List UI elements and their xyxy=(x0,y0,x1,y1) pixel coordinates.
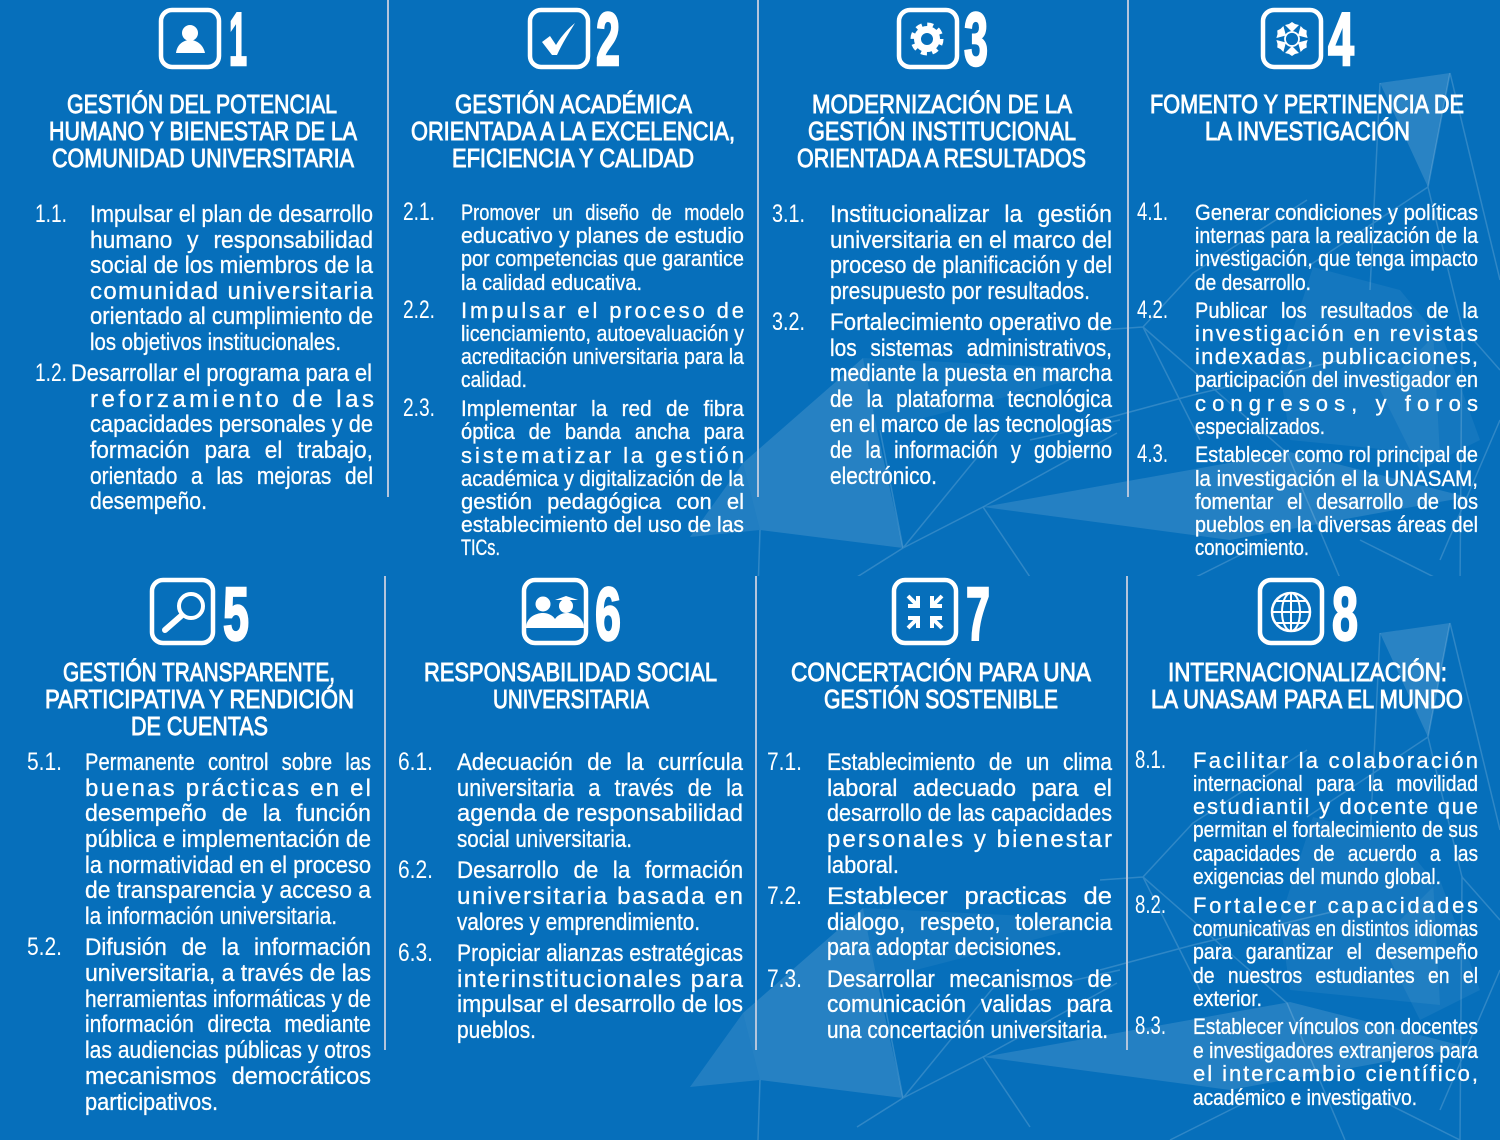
text block 8.1: Facilitar la colaboración xyxy=(1193,748,1478,773)
text block 7.1: personales y bienestar xyxy=(827,826,1112,853)
text block 4.2: participación del investigador en xyxy=(1195,367,1478,392)
heading 5: PARTICIPATIVA Y RENDICIÓN xyxy=(45,684,354,714)
heading 2 xyxy=(411,89,735,173)
icon: people xyxy=(524,580,586,643)
text block 2.1: 2.1. xyxy=(403,198,435,226)
heading 5 xyxy=(45,657,354,741)
text block 8.1: 8.1. xyxy=(1135,746,1166,774)
heading 1 xyxy=(49,89,358,173)
text block 5.1: la normatividad en el proceso xyxy=(85,852,371,879)
text block 2.1: la calidad educativa. xyxy=(461,270,642,295)
text block 3.1: presupuesto por resultados. xyxy=(830,278,1090,305)
text block 4.3: fomentar el desarrollo de los xyxy=(1195,489,1478,514)
heading 1: COMUNIDAD UNIVERSITARIA xyxy=(52,143,355,173)
text block 2.2: licenciamiento, autoevaluación y xyxy=(461,321,744,346)
text block 6.3: impulsar el desarrollo de los xyxy=(457,991,743,1018)
number 7: 7 xyxy=(966,572,990,656)
text block 7.3 xyxy=(767,965,1113,1044)
text block 4.3 xyxy=(1137,440,1478,560)
text block 3.2: 3.2. xyxy=(772,308,805,336)
heading 2: GESTIÓN ACADÉMICA xyxy=(455,89,693,119)
text block 6.1: Adecuación de la currícula xyxy=(457,749,744,776)
text block 6.2: Desarrollo de la formación xyxy=(457,857,743,884)
heading 2: EFICIENCIA Y CALIDAD xyxy=(452,143,694,173)
heading 7: CONCERTACIÓN PARA UNA xyxy=(791,657,1092,687)
text block 4.1: 4.1. xyxy=(1137,198,1168,226)
text block 1.1: Impulsar el plan de desarrollo xyxy=(90,201,373,228)
text block 7.1: desarrollo de las capacidades xyxy=(827,800,1112,827)
text block 5.2: participativos. xyxy=(85,1089,218,1116)
text block 4.3: Establecer como rol principal de xyxy=(1195,442,1478,467)
panel 7: concertación xyxy=(767,572,1113,1044)
text block 6.3: interinstitucionales para xyxy=(457,966,744,993)
text block 4.2: 4.2. xyxy=(1137,296,1168,324)
heading 3: MODERNIZACIÓN DE LA xyxy=(812,89,1073,119)
icon: magnifying glass xyxy=(152,580,213,643)
text block 4.3: conocimiento. xyxy=(1195,535,1309,560)
text block 8.3: 8.3. xyxy=(1135,1012,1166,1040)
text block 5.1: buenas prácticas en el xyxy=(85,775,371,802)
number 8: 8 xyxy=(1332,572,1358,656)
text block 5.2: información directa mediante xyxy=(85,1011,371,1038)
text block 5.2: herramientas informáticas y de xyxy=(85,986,371,1013)
text block 4.3: la investigación el la UNASAM, xyxy=(1195,466,1478,491)
panel 3: modernización xyxy=(772,0,1113,490)
text block 8.2: 8.2. xyxy=(1135,891,1166,919)
text block 8.1 xyxy=(1135,746,1478,889)
text block 8.2 xyxy=(1135,891,1478,1011)
background: low-poly network xyxy=(690,73,1500,1140)
text block 5.1: la información universitaria. xyxy=(85,903,337,930)
text block 7.2: dialogo, respeto, tolerancia xyxy=(827,909,1113,936)
text block 4.2: investigación en revistas xyxy=(1195,321,1478,346)
text block 5.1: de transparencia y acceso a xyxy=(85,877,372,904)
text block 7.3: Desarrollar mecanismos de xyxy=(827,966,1112,993)
text block 2.3: óptica de banda ancha para xyxy=(461,419,745,444)
text block 8.1: estudiantil y docente que xyxy=(1193,794,1478,819)
text block 3.1: 3.1. xyxy=(772,200,805,228)
text block 1.2: Desarrollar el programa para el xyxy=(71,360,372,387)
icon: arrows inward xyxy=(894,580,956,643)
text block 4.1 xyxy=(1137,198,1479,295)
text block 2.2: acreditación universitaria para la xyxy=(461,344,745,369)
text block 5.2: las audiencias públicas y otros xyxy=(85,1037,371,1064)
heading 1: GESTIÓN DEL POTENCIAL xyxy=(67,89,337,119)
panel 5: gestión transparente xyxy=(27,572,372,1116)
text block 7.1: 7.1. xyxy=(767,748,802,776)
text block 5.1: Permanente control sobre las xyxy=(85,749,371,776)
text block 4.2: Publicar los resultados de la xyxy=(1195,298,1479,323)
text block 1.2: desempeño. xyxy=(90,488,207,515)
heading 3: ORIENTADA A RESULTADOS xyxy=(797,143,1086,173)
text block 6.1: universitaria a través de la xyxy=(457,775,744,802)
text block 3.2: electrónico. xyxy=(830,463,937,490)
icon: check box xyxy=(530,10,588,67)
heading 8 xyxy=(1151,657,1463,714)
text block 2.1: por competencias que garantice xyxy=(461,246,744,271)
heading 2: ORIENTADA A LA EXCELENCIA, xyxy=(411,116,735,146)
text block 1.1: los objetivos institucionales. xyxy=(90,329,341,356)
text block 3.2: de la información y gobierno xyxy=(830,437,1112,464)
text block 1.2: 1.2. xyxy=(35,359,67,387)
text block 4.1: de desarrollo. xyxy=(1195,270,1311,295)
text block 7.1: laboral. xyxy=(827,852,899,879)
number 6: 6 xyxy=(595,572,621,656)
text block 1.1: orientado al cumplimiento de xyxy=(90,303,373,330)
text block 1.2: reforzamiento de las xyxy=(90,386,374,413)
text block 6.2: 6.2. xyxy=(398,856,433,884)
text block 2.3: gestión pedagógica con el xyxy=(461,489,744,514)
text block 5.2: 5.2. xyxy=(27,933,62,961)
text block 1.1: comunidad universitaria xyxy=(90,278,374,305)
text block 4.3: 4.3. xyxy=(1137,440,1168,468)
text block 8.3: el intercambio científico, xyxy=(1193,1061,1478,1086)
heading 6: RESPONSABILIDAD SOCIAL xyxy=(424,657,717,687)
text block 3.1 xyxy=(772,200,1112,305)
text block 2.1: educativo y planes de estudio xyxy=(461,223,744,248)
text block 2.3: Implementar la red de fibra xyxy=(461,396,745,421)
text block 7.1: Establecimiento de un clima xyxy=(827,749,1113,776)
heading 6 xyxy=(424,657,717,714)
text block 6.1: social universitaria. xyxy=(457,826,632,853)
icon: snowflake network xyxy=(1263,10,1321,67)
text block 3.2 xyxy=(772,308,1113,490)
text block 6.1 xyxy=(398,748,744,853)
heading 6: UNIVERSITARIA xyxy=(493,684,650,714)
text block 7.2: Establecer practicas de xyxy=(827,883,1112,910)
heading 3 xyxy=(797,89,1086,173)
text block 8.1: exigencias del mundo global. xyxy=(1193,864,1441,889)
heading 4: LA INVESTIGACIÓN xyxy=(1205,116,1410,146)
heading 8: INTERNACIONALIZACIÓN: xyxy=(1168,657,1447,687)
text block 6.2 xyxy=(398,856,743,936)
icon: globe xyxy=(1260,580,1322,643)
panel 4: fomento de la investigación xyxy=(1137,0,1479,560)
text block 7.1: laboral adecuado para el xyxy=(827,775,1112,802)
text block 2.2: Impulsar el proceso de xyxy=(461,298,744,323)
text block 7.1 xyxy=(767,748,1113,879)
text block 5.2: universitaria, a través de las xyxy=(85,960,371,987)
text block 4.2: congresos, y foros xyxy=(1195,391,1478,416)
text block 7.3: comunicación validas para xyxy=(827,991,1113,1018)
text block 6.2: valores y emprendimiento. xyxy=(457,909,700,936)
text block 6.3: pueblos. xyxy=(457,1017,536,1044)
text block 6.3: Propiciar alianzas estratégicas xyxy=(457,940,743,967)
text block 1.2 xyxy=(35,359,374,515)
text block 3.1: Institucionalizar la gestión xyxy=(830,201,1112,228)
heading 3: GESTIÓN INSTITUCIONAL xyxy=(808,116,1076,146)
heading 5: GESTIÓN TRANSPARENTE, xyxy=(63,657,335,687)
heading 7: GESTIÓN SOSTENIBLE xyxy=(824,684,1058,714)
text block 5.2: mecanismos democráticos xyxy=(85,1063,371,1090)
text block 2.3: TICs. xyxy=(461,535,500,560)
text block 3.2: en el marco de las tecnologías xyxy=(830,411,1112,438)
text block 6.3 xyxy=(398,939,744,1044)
text block 8.2: Fortalecer capacidades xyxy=(1193,893,1478,918)
text block 4.1: Generar condiciones y políticas xyxy=(1195,200,1478,225)
text block 3.2: los sistemas administrativos, xyxy=(830,335,1112,362)
text block 3.1: universitaria en el marco del xyxy=(830,227,1112,254)
text block 8.2: exterior. xyxy=(1193,986,1262,1011)
text block 6.1: agenda de responsabilidad xyxy=(457,800,743,827)
text block 3.2: de la plataforma tecnológica xyxy=(830,386,1113,413)
text block 8.3 xyxy=(1135,1012,1479,1110)
text block 4.2: especializados. xyxy=(1195,414,1325,439)
text block 2.3: establecimiento del uso de las xyxy=(461,512,744,537)
text block 5.1: pública e implementación de xyxy=(85,826,371,853)
text block 5.1 xyxy=(27,748,372,930)
text block 7.3: 7.3. xyxy=(767,965,802,993)
panel 1: gestión del potencial humano xyxy=(35,0,374,515)
text block 5.1: 5.1. xyxy=(27,748,62,776)
number 5: 5 xyxy=(223,572,249,656)
text block 5.1: desempeño de la función xyxy=(85,800,371,827)
panel 6: responsabilidad social xyxy=(398,572,744,1044)
text block 3.1: proceso de planificación y del xyxy=(830,252,1112,279)
text block 5.2: Difusión de la información xyxy=(85,934,371,961)
text block 1.1 xyxy=(35,200,374,356)
text block 2.3 xyxy=(403,394,745,560)
text block 7.2: para adoptar decisiones. xyxy=(827,934,1062,961)
text block 6.1: 6.1. xyxy=(398,748,433,776)
text block 4.2 xyxy=(1137,296,1479,439)
text block 1.1: humano y responsabilidad xyxy=(90,227,373,254)
text block 2.2: calidad. xyxy=(461,367,527,392)
text block 2.3: 2.3. xyxy=(403,394,435,422)
text block 7.2 xyxy=(767,882,1113,961)
text block 2.3: sistematizar la gestión xyxy=(461,443,744,468)
text block 1.1: social de los miembros de la xyxy=(90,252,374,279)
text block 1.2: formación para el trabajo, xyxy=(90,437,373,464)
text block 2.3: académica y digitalización de la xyxy=(461,466,745,491)
text block 6.2: universitaria basada en xyxy=(457,883,743,910)
text block 1.2: orientado a las mejoras del xyxy=(90,463,373,490)
text block 5.2 xyxy=(27,933,371,1116)
text block 3.2: Fortalecimiento operativo de xyxy=(830,309,1112,336)
icon: person xyxy=(161,10,219,67)
text block 2.2: 2.2. xyxy=(403,296,435,324)
dividers xyxy=(385,0,1128,1050)
text block 2.1 xyxy=(403,198,744,295)
text block 2.2 xyxy=(403,296,745,392)
heading 5: DE CUENTAS xyxy=(131,711,268,741)
panel 2: gestión académica xyxy=(403,0,745,560)
text block 2.1: Promover un diseño de modelo xyxy=(461,200,744,225)
heading 1: HUMANO Y BIENESTAR DE LA xyxy=(49,116,358,146)
text block 4.2: indexadas, publicaciones, xyxy=(1195,344,1478,369)
heading 4 xyxy=(1150,89,1464,146)
icon: gear xyxy=(899,10,957,67)
text block 7.2: 7.2. xyxy=(767,882,802,910)
text block 6.3: 6.3. xyxy=(398,939,433,967)
text block 8.3: académico e investigativo. xyxy=(1193,1085,1417,1110)
text block 1.1: 1.1. xyxy=(35,200,67,228)
text block 3.2: mediante la puesta en marcha xyxy=(830,360,1113,387)
panel 8: internacionalización xyxy=(1135,572,1479,1110)
text block 7.3: una concertación universitaria. xyxy=(827,1017,1108,1044)
heading 7 xyxy=(791,657,1092,714)
text block 1.2: capacidades personales y de xyxy=(90,411,373,438)
